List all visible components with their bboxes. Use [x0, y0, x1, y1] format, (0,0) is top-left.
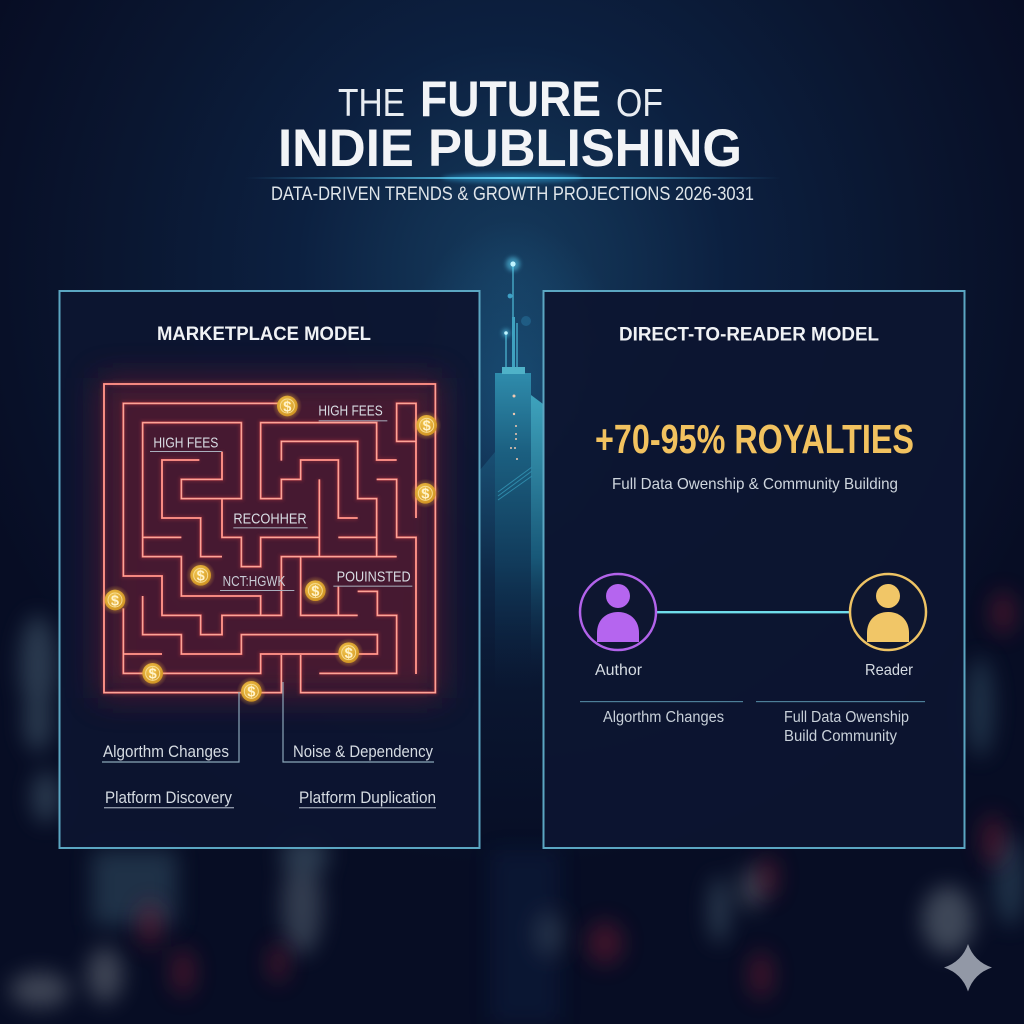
maze: [100, 384, 441, 706]
coin: $: [283, 399, 291, 415]
coin: $: [421, 487, 429, 503]
title: THE: [338, 82, 405, 125]
royalties stat: +70-95% ROYALTIES: [595, 416, 914, 462]
maze label: centre: RECOHHER: [233, 511, 307, 527]
panel heading: DIRECT-TO-READER MODEL: [619, 324, 879, 346]
callout: noise and dependency: [283, 682, 434, 762]
maze glow backdrop: [98, 378, 442, 698]
subtitle: DATA-DRIVEN TRENDS & GROWTH PROJECTIONS 2026-3031: [271, 184, 754, 205]
maze label: high fees right: HIGH FEES: [318, 403, 383, 419]
connector line: [656, 611, 850, 613]
title: INDIE PUBLISHING: [278, 119, 742, 178]
coin: [301, 576, 330, 605]
coin: [100, 585, 130, 615]
coin: [334, 638, 363, 667]
callout: noise and dependency: Noise & Dependency: [293, 743, 434, 761]
maze label: lower right: POUINSTED: [337, 569, 411, 585]
right note: [756, 701, 925, 745]
callout: platform discovery: Platform Discovery: [105, 789, 233, 807]
coin: $: [247, 685, 255, 701]
title rule: [245, 173, 780, 183]
icon: author: [580, 574, 656, 650]
title: [278, 71, 742, 178]
reader label: Reader: [865, 662, 914, 679]
coin: $: [311, 584, 319, 600]
left note: Algorthm Changes: [603, 709, 724, 726]
coin: $: [197, 569, 205, 585]
callout: platform duplication: Platform Duplication: [299, 789, 436, 807]
coin: [273, 391, 302, 421]
right note: Build Community: [784, 728, 897, 745]
coin: [138, 659, 167, 688]
icon: sparkle watermark: [944, 944, 992, 992]
coin: [186, 561, 215, 590]
coin: [411, 479, 440, 508]
callout: algorithm changes: [102, 692, 239, 762]
coin: $: [423, 419, 431, 435]
panel: marketplace model: [60, 291, 480, 848]
panel: direct-to-reader model: [544, 291, 964, 848]
right note: Full Data Owenship: [784, 709, 909, 726]
icon: reader: [850, 574, 926, 650]
royalties caption: Full Data Owenship & Community Building: [612, 476, 898, 493]
coin: $: [111, 593, 119, 609]
blurred city bokeh: [10, 591, 1024, 1024]
coin: $: [149, 667, 157, 683]
coin: $: [345, 646, 353, 662]
coin: [237, 677, 266, 706]
maze label: high fees left: HIGH FEES: [153, 435, 218, 451]
panel heading: MARKETPLACE MODEL: [157, 323, 371, 345]
title: OF: [616, 82, 663, 125]
title: FUTURE: [420, 71, 601, 127]
coin: [412, 411, 441, 440]
callout: algorithm changes: Algorthm Changes: [103, 743, 229, 761]
author label: Author: [595, 662, 643, 679]
skyscraper: [393, 220, 633, 693]
maze label: lower centre: NCT:HGWK: [223, 574, 286, 590]
